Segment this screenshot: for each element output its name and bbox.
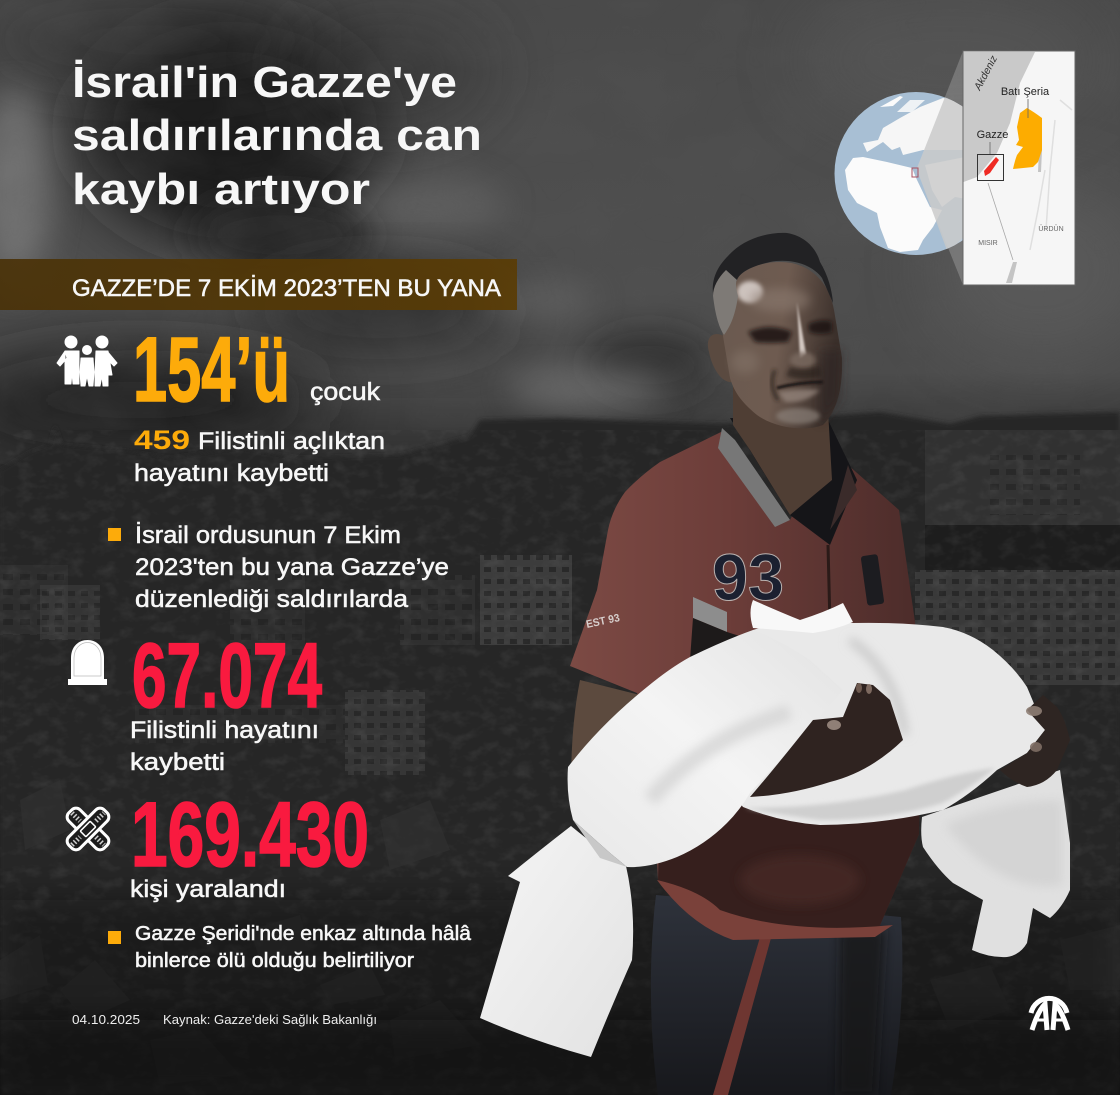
footer: date and source: Kaynak: Gazze'deki Sağlık Bakanlığı: [163, 1013, 377, 1027]
bullet text: attacks since 7 October: İsrail ordusunun 7 Ekim: [135, 522, 401, 549]
bullet text: bodies under rubble: binlerce ölü olduğu belirtiliyor: [135, 950, 414, 972]
neck: [733, 385, 832, 515]
selection marker: [912, 168, 918, 177]
stat: deaths: 67.074: [132, 625, 322, 727]
forehead highlight: [737, 281, 763, 303]
brows and eyes: [748, 327, 792, 343]
inset map: MISIR: [978, 240, 998, 247]
title: [72, 58, 482, 214]
hand: left: [750, 683, 903, 797]
bullet text: bodies under rubble: Gazze Şeridi'nde enkaz altında hâlâ: [135, 923, 472, 945]
stat: 154'ü children: 154’ü: [133, 319, 290, 421]
stat: 154'ü children: çocuk: [310, 378, 381, 406]
hair: [713, 233, 833, 335]
icon: tombstone: [68, 640, 107, 685]
text: starvation deaths: 459: [134, 425, 190, 455]
inset map: [963, 51, 1075, 285]
land: Africa: [845, 157, 942, 252]
title: saldırılarında can: [72, 111, 482, 160]
stat: deaths: Filistinli hayatını: [130, 717, 319, 744]
face: [721, 262, 842, 428]
stat: deaths: kaybetti: [130, 749, 225, 776]
map labels: Akdeniz: [971, 53, 1000, 93]
arm: [571, 680, 640, 790]
title: kaybı artıyor: [72, 165, 370, 214]
tents: [0, 780, 1120, 1085]
text: starvation deaths: [134, 425, 385, 487]
shirt number print: 93: [712, 540, 784, 614]
globe: [834, 92, 962, 255]
nose highlight: [797, 302, 806, 358]
shroud: main body: [568, 600, 1045, 867]
border: [988, 183, 1013, 260]
inset map: ÜRDÜN: [1038, 225, 1064, 233]
head: [708, 233, 842, 428]
stat: deaths: [130, 625, 322, 776]
land: Greenland: [880, 96, 903, 107]
inset map: Gazze: [977, 129, 1008, 141]
sea: [964, 52, 1035, 182]
shirt lower shadow: [658, 790, 920, 938]
shroud: right tail: [921, 770, 1070, 957]
bullet text: attacks since 7 October: [108, 522, 449, 613]
stat: injured: 169.430: [131, 784, 369, 886]
mouth: [777, 382, 823, 388]
Gaza box: [978, 154, 1004, 180]
icon: family: [57, 336, 117, 386]
title: İsrail'in Gazze'ye: [72, 58, 457, 107]
icon: crossed bandages: [65, 806, 111, 852]
land: Europe: [863, 98, 962, 155]
ear: [708, 334, 733, 382]
land: Scandinavia: [897, 100, 925, 112]
footer: date and source: [72, 1013, 377, 1027]
trousers: [651, 895, 902, 1095]
stat: injured: [130, 784, 369, 903]
shirt: [570, 418, 920, 940]
shadows under nose and cheek: [786, 366, 822, 379]
chin stubble: [776, 408, 820, 424]
footer: date and source: 04.10.2025: [72, 1013, 140, 1027]
stat: injured: kişi yaralandı: [130, 876, 286, 903]
banner heading: [0, 259, 517, 310]
text: starvation deaths: hayatını kaybetti: [134, 460, 329, 487]
bullet text: attacks since 7 October: 2023'ten bu yana Gazze’ye: [135, 554, 449, 581]
locator map: [834, 51, 1075, 285]
chest badge: [861, 554, 884, 606]
photo: grieving man holding a shrouded child: [480, 233, 1070, 1095]
collar: [718, 428, 790, 527]
bullet text: bodies under rubble: [108, 923, 472, 972]
bullet text: attacks since 7 October: düzenlediği saldırılarda: [135, 586, 408, 613]
map beam: [917, 51, 963, 285]
Gaza: [984, 157, 999, 176]
shroud: left tail: [480, 826, 633, 1057]
relief: [1030, 100, 1072, 250]
icon: Anadolu Agency logo: [1031, 998, 1068, 1030]
hand: right: [1000, 695, 1070, 787]
land: Arabia: [925, 158, 962, 206]
banner heading: GAZZE’DE 7 EKİM 2023’TEN BU YANA: [72, 275, 502, 302]
inset map: Batı Şeria: [1001, 86, 1050, 98]
text: starvation deaths: Filistinli açlıktan: [198, 428, 385, 455]
top knot: [750, 600, 853, 633]
West Bank: [1013, 108, 1042, 169]
sleeve print: EST 93: [585, 612, 621, 631]
